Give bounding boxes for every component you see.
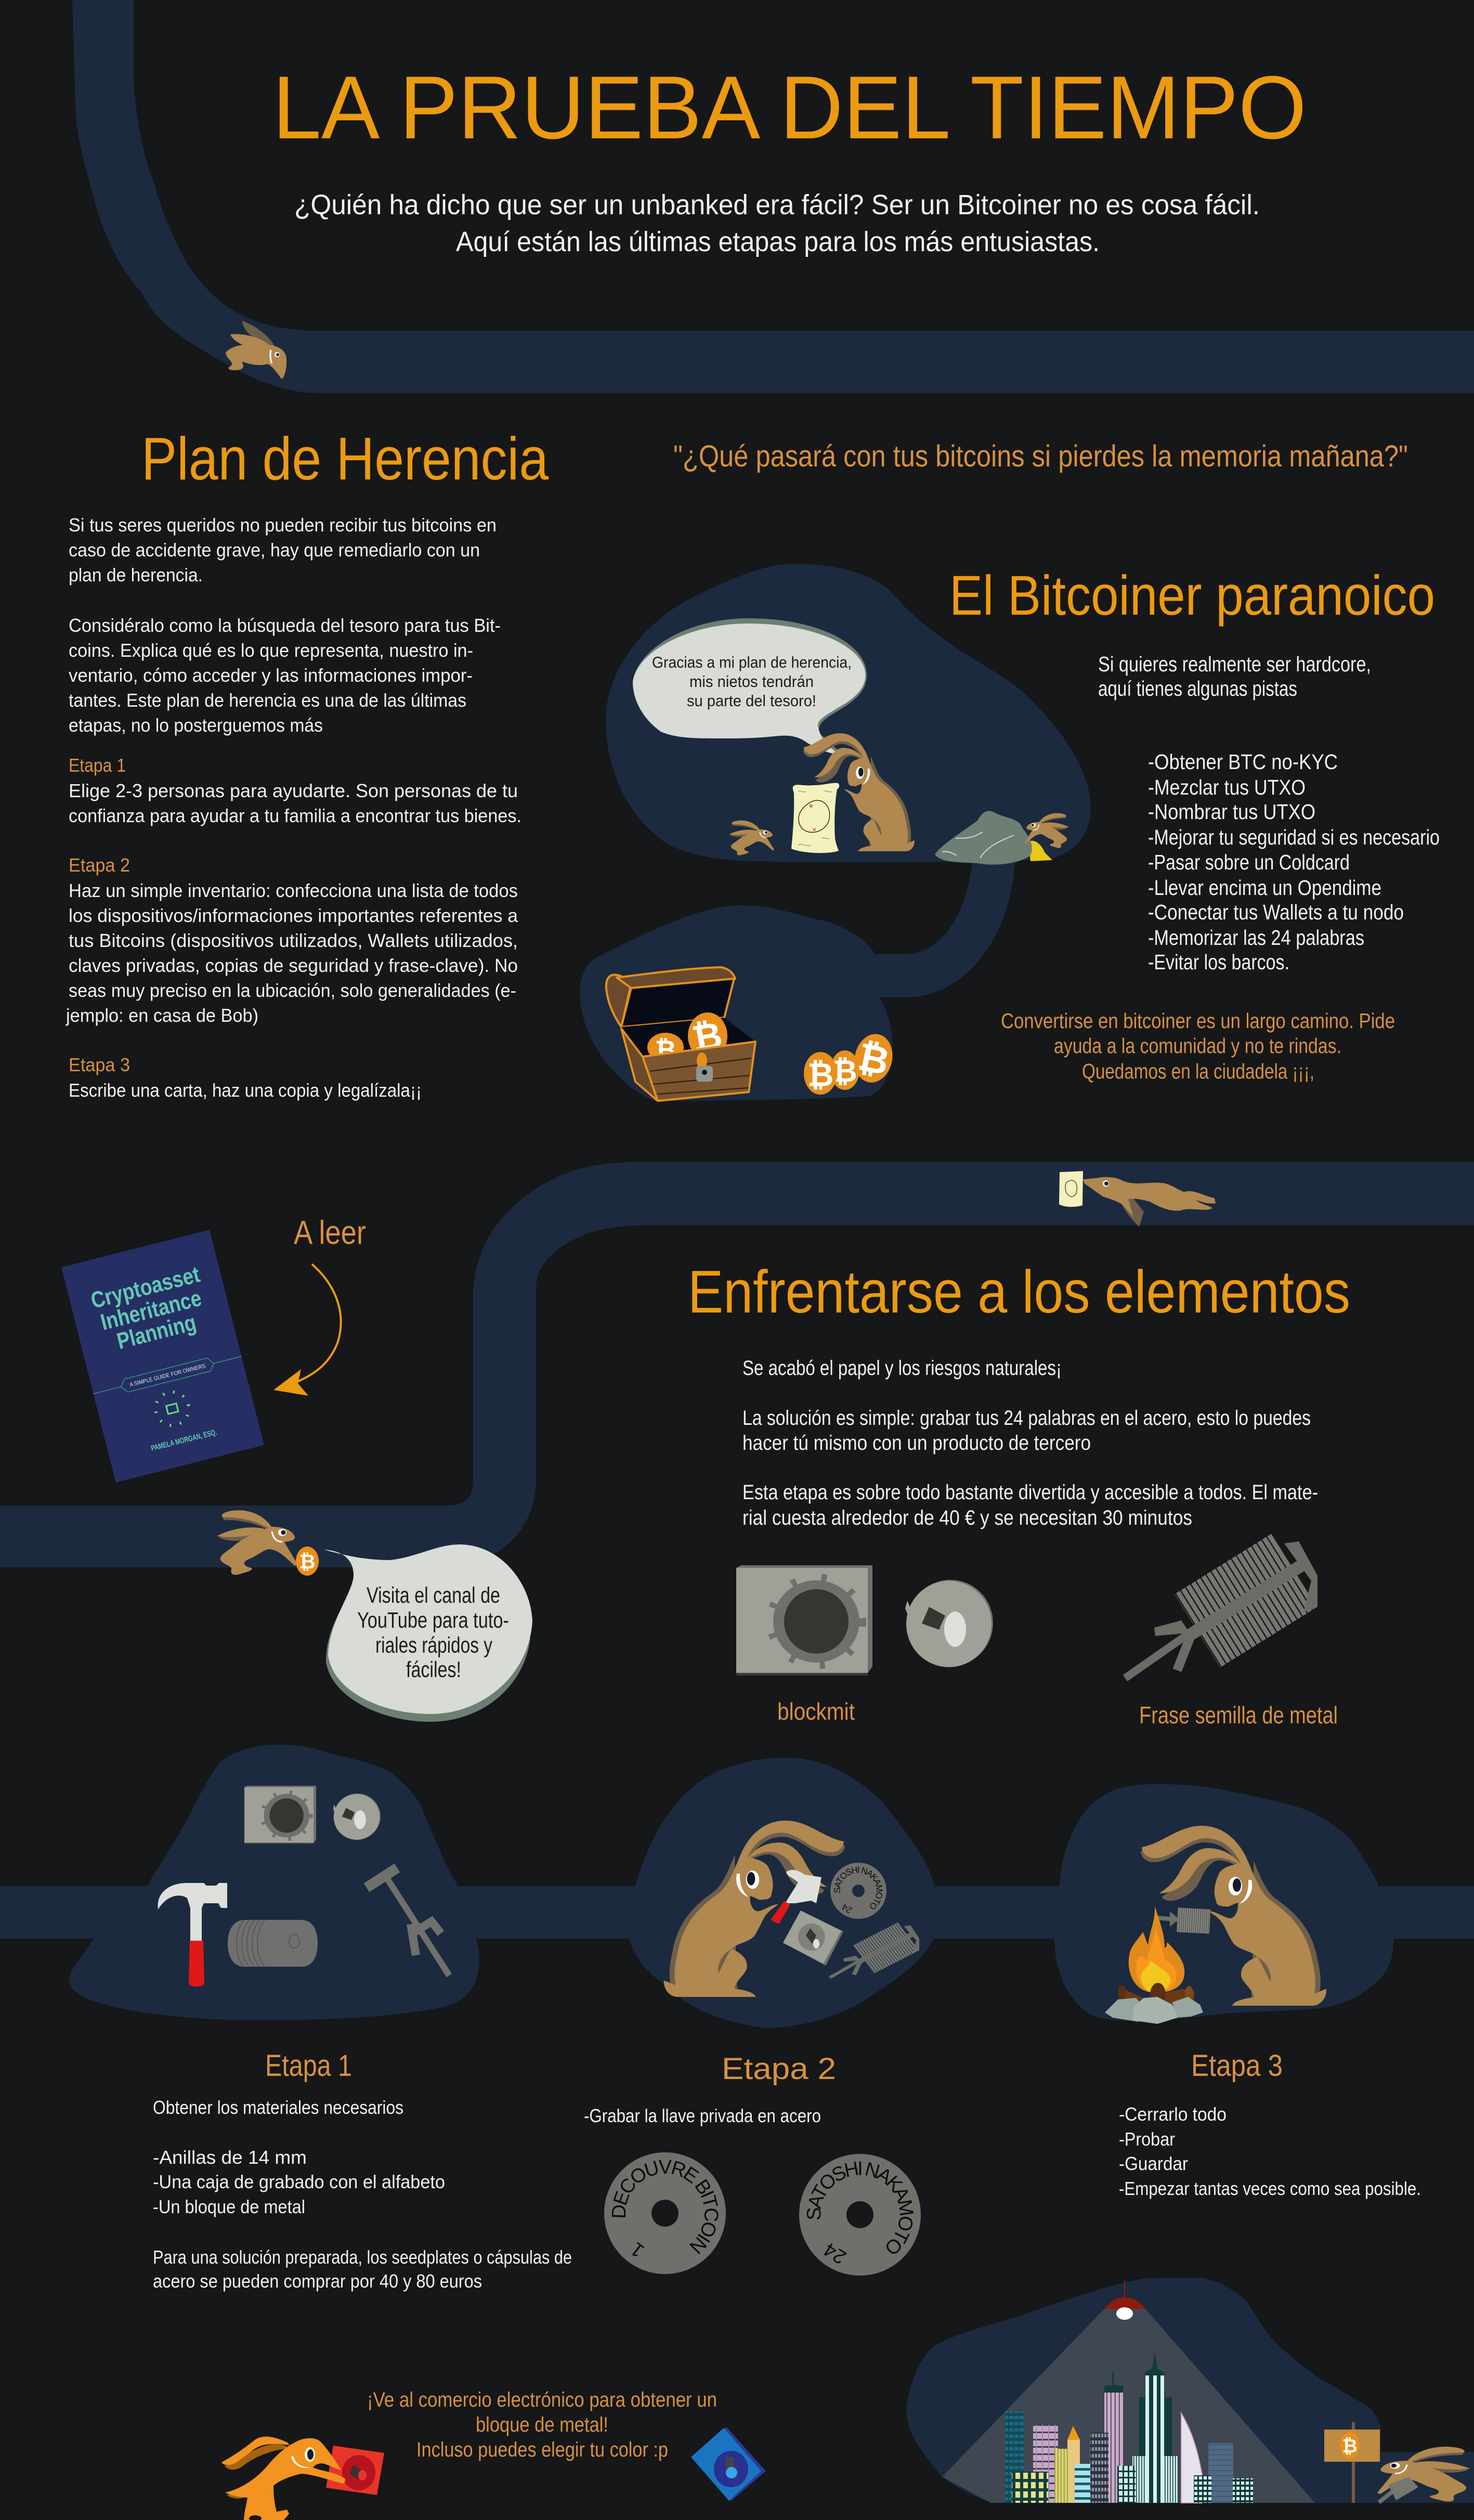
red block <box>326 2446 384 2495</box>
list: paranoid tips <box>1148 750 1440 974</box>
campfire <box>1105 1906 1203 2024</box>
text block: Plan de Herencia body: etapas, no lo posterguemos más <box>69 715 323 736</box>
text block: step 2: -Grabar la llave privada en acero <box>584 2105 821 2126</box>
speech bubble: inheritance: mis nietos tendrán <box>689 672 814 691</box>
icon: blockmit disc <box>905 1580 993 1667</box>
bitcoin eggs <box>804 1031 897 1095</box>
text block: Plan de Herencia body: Etapa 2 <box>69 854 130 876</box>
text block: step 1 <box>153 2097 572 2292</box>
text block: Plan de Herencia body: jemplo: en casa de Bob) <box>66 1005 258 1026</box>
panel: citadel blob <box>906 2278 1474 2503</box>
text block: Plan de Herencia body: claves privadas, copias de seguridad y frase-clave). No <box>69 955 518 976</box>
book cover: Cryptoasset <box>88 1262 203 1314</box>
text block: Plan de Herencia body: seas muy preciso en la ubicación, solo generalidades (e- <box>69 980 516 1001</box>
book cover: Planning <box>114 1310 199 1354</box>
speech bubble: YouTube: fáciles! <box>406 1657 461 1682</box>
heading: Plan de Herencia: Plan de Herencia <box>141 425 549 492</box>
arrow <box>273 1264 341 1396</box>
panel: upper cave blob with connector <box>606 564 1091 862</box>
list: paranoid tips: -Evitar los barcos. <box>1148 950 1289 974</box>
book cover: PAMELA MORGAN, ESQ. <box>150 1428 218 1453</box>
small rabbit left <box>729 821 774 855</box>
treasure map <box>791 783 839 853</box>
text block: elements body: Se acabó el papel y los riesgos naturales¡ <box>742 1357 1062 1380</box>
step 3 rabbit <box>1141 1826 1326 2006</box>
rabbit with map <box>803 733 915 851</box>
step 2 engraved disc: SATOSHI NAKAMOTO <box>834 1867 883 1910</box>
heading: Etapa 3: Etapa 3 <box>1191 2049 1283 2083</box>
text block: step 1: -Anillas de 14 mm <box>153 2147 307 2168</box>
text block: Plan de Herencia body: Etapa 3 <box>69 1054 130 1075</box>
book cover: A SIMPLE GUIDE FOR OWNERS <box>129 1363 206 1388</box>
subtitle: ¿Quién ha dicho que ser un unbanked era fácil? Ser un Bitcoiner no es cosa fácil. <box>294 189 1260 220</box>
top path band <box>72 0 1474 393</box>
disc: DECOUVRE BITCOIN: 1 <box>627 2238 648 2262</box>
speech bubble: YouTube: riales rápidos y <box>375 1633 492 1658</box>
text block: community note: ayuda a la comunidad y no te rindas. <box>1054 1034 1341 1058</box>
callout: shop: ¡Ve al comercio electrónico para obtener un <box>367 2388 717 2411</box>
speech bubble: inheritance <box>633 618 867 755</box>
callout: shop: Incluso puedes elegir tu color :p <box>416 2438 668 2461</box>
step 1 hammer <box>158 1883 227 1986</box>
panel: lower cave blob <box>580 905 892 1101</box>
horizontal band through steps <box>0 1886 1474 1939</box>
bitcoin eggs: ₿ <box>807 1056 833 1094</box>
light cone <box>942 2309 1315 2503</box>
speech bubble: inheritance: su parte del tesoro! <box>687 692 816 710</box>
text block: Plan de Herencia body: Haz un simple inventario: confecciona una lista de todos <box>69 880 518 901</box>
text block: Plan de Herencia body: Etapa 1 <box>69 755 126 776</box>
bitcoin eggs: ₿ <box>832 1054 857 1089</box>
treasure map: ★ <box>808 802 814 810</box>
step 3 seed plate in hand <box>1157 1907 1210 1934</box>
treasure chest <box>606 967 755 1101</box>
step 2 hammer <box>771 1870 821 1924</box>
rabbit with bitcoin egg: ₿ <box>299 1550 315 1573</box>
list: paranoid tips: -Mezclar tus UTXO <box>1148 775 1306 799</box>
text block: community note: Quedamos en la ciudadela ¡¡¡, <box>1082 1059 1314 1083</box>
step 2 engraved disc: 24 <box>840 1902 854 1915</box>
text block: step 3: -Probar <box>1119 2128 1175 2150</box>
list: paranoid tips: -Pasar sobre un Coldcard <box>1148 850 1350 874</box>
panel: step 1 blob <box>69 1745 479 2020</box>
subtitle: Aquí están las últimas etapas para los más entusiastas. <box>456 226 1100 257</box>
small rabbit at rock <box>1025 813 1069 848</box>
disc: SATOSHI NAKAMOTO: 24 <box>820 2238 850 2268</box>
treasure chest: ₿ <box>655 1035 676 1065</box>
bitcoin eggs: ₿ <box>853 1034 893 1084</box>
text block: Plan de Herencia body: Considéralo como la búsqueda del tesoro para tus Bit- <box>69 615 501 636</box>
text block: Plan de Herencia body: los dispositivos/informaciones importantes referentes a <box>69 905 518 926</box>
heading: Enfrentarse a los elementos: Enfrentarse a los elementos <box>688 1258 1350 1326</box>
text block: elements body: hacer tú mismo con un producto de tercero <box>742 1432 1091 1454</box>
speech bubble: YouTube: Visita el canal de <box>367 1583 500 1608</box>
text block: Plan de Herencia body: confianza para ayudar a tu familia a encontrar tus bienes. <box>69 805 521 826</box>
text block: elements body: La solución es simple: grabar tus 24 palabras en el acero, esto lo puedes <box>742 1407 1311 1430</box>
label: A leer: A leer <box>294 1214 366 1251</box>
text block: step 3: -Cerrarlo todo <box>1119 2103 1227 2125</box>
bitcoin signpost: ₿ <box>1342 2436 1358 2457</box>
disc: DECOUVRE BITCOIN: DECOUVRE BITCOIN <box>611 2160 719 2254</box>
panel: step 3 blob <box>1054 1784 1393 2024</box>
text block: Plan de Herencia body: tus Bitcoins (dispositivos utilizados, Wallets utilizados, <box>69 930 518 951</box>
list: paranoid tips: -Obtener BTC no-KYC <box>1148 750 1338 774</box>
text block: elements body <box>742 1357 1318 1529</box>
rabbit stretching with map <box>1059 1171 1216 1227</box>
list: paranoid tips: -Llevar encima un Opendime <box>1148 876 1381 900</box>
text block: step 3 <box>1119 2103 1421 2199</box>
connector tunnel <box>858 858 1015 997</box>
step 2 rabbit <box>664 1821 845 1997</box>
heading: Etapa 2: Etapa 2 <box>722 2052 836 2086</box>
text block: paranoid intro: aquí tienes algunas pistas <box>1098 677 1297 700</box>
disc: SATOSHI NAKAMOTO: SATOSHI NAKAMOTO <box>807 2161 914 2254</box>
text block: Plan de Herencia body: caso de accidente grave, hay que remediarlo con un <box>69 539 480 561</box>
text block: Plan de Herencia body: plan de herencia. <box>69 564 203 586</box>
book cover <box>61 1230 264 1483</box>
text block: paranoid intro: Si quieres realmente ser hardcore, <box>1098 652 1371 676</box>
callout: shop <box>367 2388 717 2461</box>
text block: step 1: acero se pueden comprar por 40 y 80 euros <box>153 2270 482 2292</box>
step 1 tool <box>367 1868 449 1976</box>
rabbit dragging block <box>1377 2447 1470 2502</box>
speech bubble: YouTube <box>324 1544 532 1722</box>
speech bubble: YouTube: YouTube para tuto- <box>357 1608 509 1633</box>
label: Frase semilla de metal: Frase semilla de metal <box>1139 1701 1338 1729</box>
text block: step 1: Para una solución preparada, los seedplates o cápsulas de <box>153 2246 572 2268</box>
text block: step 1: Obtener los materiales necesarios <box>153 2097 403 2118</box>
text block: community note: Convertirse en bitcoiner es un largo camino. Pide <box>1001 1009 1395 1033</box>
title: LA PRUEBA DEL TIEMPO <box>272 58 1307 158</box>
city skyline <box>1005 2352 1253 2503</box>
rabbit with bitcoin egg <box>217 1510 319 1576</box>
text block: Plan de Herencia body: Si tus seres queridos no pueden recibir tus bitcoins en <box>69 514 497 536</box>
icon: metal seed phrase plate <box>1125 1541 1318 1678</box>
text block: Plan de Herencia body <box>66 514 521 1101</box>
speech bubble: inheritance: Gracias a mi plan de herencia, <box>652 653 852 671</box>
text block: step 1: -Un bloque de metal <box>153 2196 305 2217</box>
text block: Plan de Herencia body: Elige 2-3 personas para ayudarte. Son personas de tu <box>69 780 518 801</box>
step 2 seed plate <box>830 1925 919 1978</box>
step 1 disc <box>333 1794 381 1840</box>
middle path band <box>0 1162 1474 1567</box>
heading: Etapa 1: Etapa 1 <box>265 2049 352 2083</box>
text block: step 1: -Una caja de grabado con el alfabeto <box>153 2171 445 2192</box>
treasure map: × <box>812 825 816 834</box>
treasure chest: ₿ <box>689 1014 725 1060</box>
rock with hidden gold <box>935 811 1052 865</box>
step 1 block <box>244 1786 316 1844</box>
icon: blockmit block <box>736 1565 872 1675</box>
bitcoin signpost <box>1324 2422 1380 2503</box>
text block: Plan de Herencia body: ventario, cómo acceder y las informaciones impor- <box>69 665 473 686</box>
callout: shop: bloque de metal! <box>476 2413 608 2436</box>
text block: Plan de Herencia body: Escribe una carta, haz una copia y legalízala¡¡ <box>69 1080 422 1101</box>
panel: step 2 blob <box>629 1758 935 2028</box>
rabbit running down the top path <box>226 321 286 379</box>
text block: step 3: -Empezar tantas veces como sea posible. <box>1119 2178 1421 2199</box>
text block: community note <box>1001 1009 1395 1083</box>
step 1 steel roll <box>228 1920 318 1967</box>
ceiling lamp <box>1104 2279 1145 2320</box>
book cover: Inheritance <box>98 1285 204 1335</box>
text block: elements body: Esta etapa es sobre todo bastante divertida y accesible a todos. El mate- <box>742 1481 1318 1504</box>
text block: Plan de Herencia body: tantes. Este plan de herencia es una de las últimas <box>69 690 466 711</box>
text block: step 3: -Guardar <box>1119 2153 1188 2174</box>
list: paranoid tips: -Nombrar tus UTXO <box>1148 800 1315 824</box>
subtitle <box>294 189 1260 257</box>
orange rabbit <box>221 2437 345 2520</box>
label: blockmit: blockmit <box>777 1698 855 1725</box>
text block: Plan de Herencia body: coins. Explica qué es lo que representa, nuestro in- <box>69 640 473 661</box>
list: paranoid tips: -Conectar tus Wallets a tu nodo <box>1148 900 1404 924</box>
text block: paranoid intro <box>1098 652 1371 700</box>
blue block <box>691 2427 766 2501</box>
text block: elements body: rial cuesta alrededor de 40 € y se necesitan 30 minutos <box>742 1506 1192 1529</box>
list: paranoid tips: -Memorizar las 24 palabras <box>1148 926 1364 950</box>
step 2 tilted block <box>783 1911 843 1966</box>
